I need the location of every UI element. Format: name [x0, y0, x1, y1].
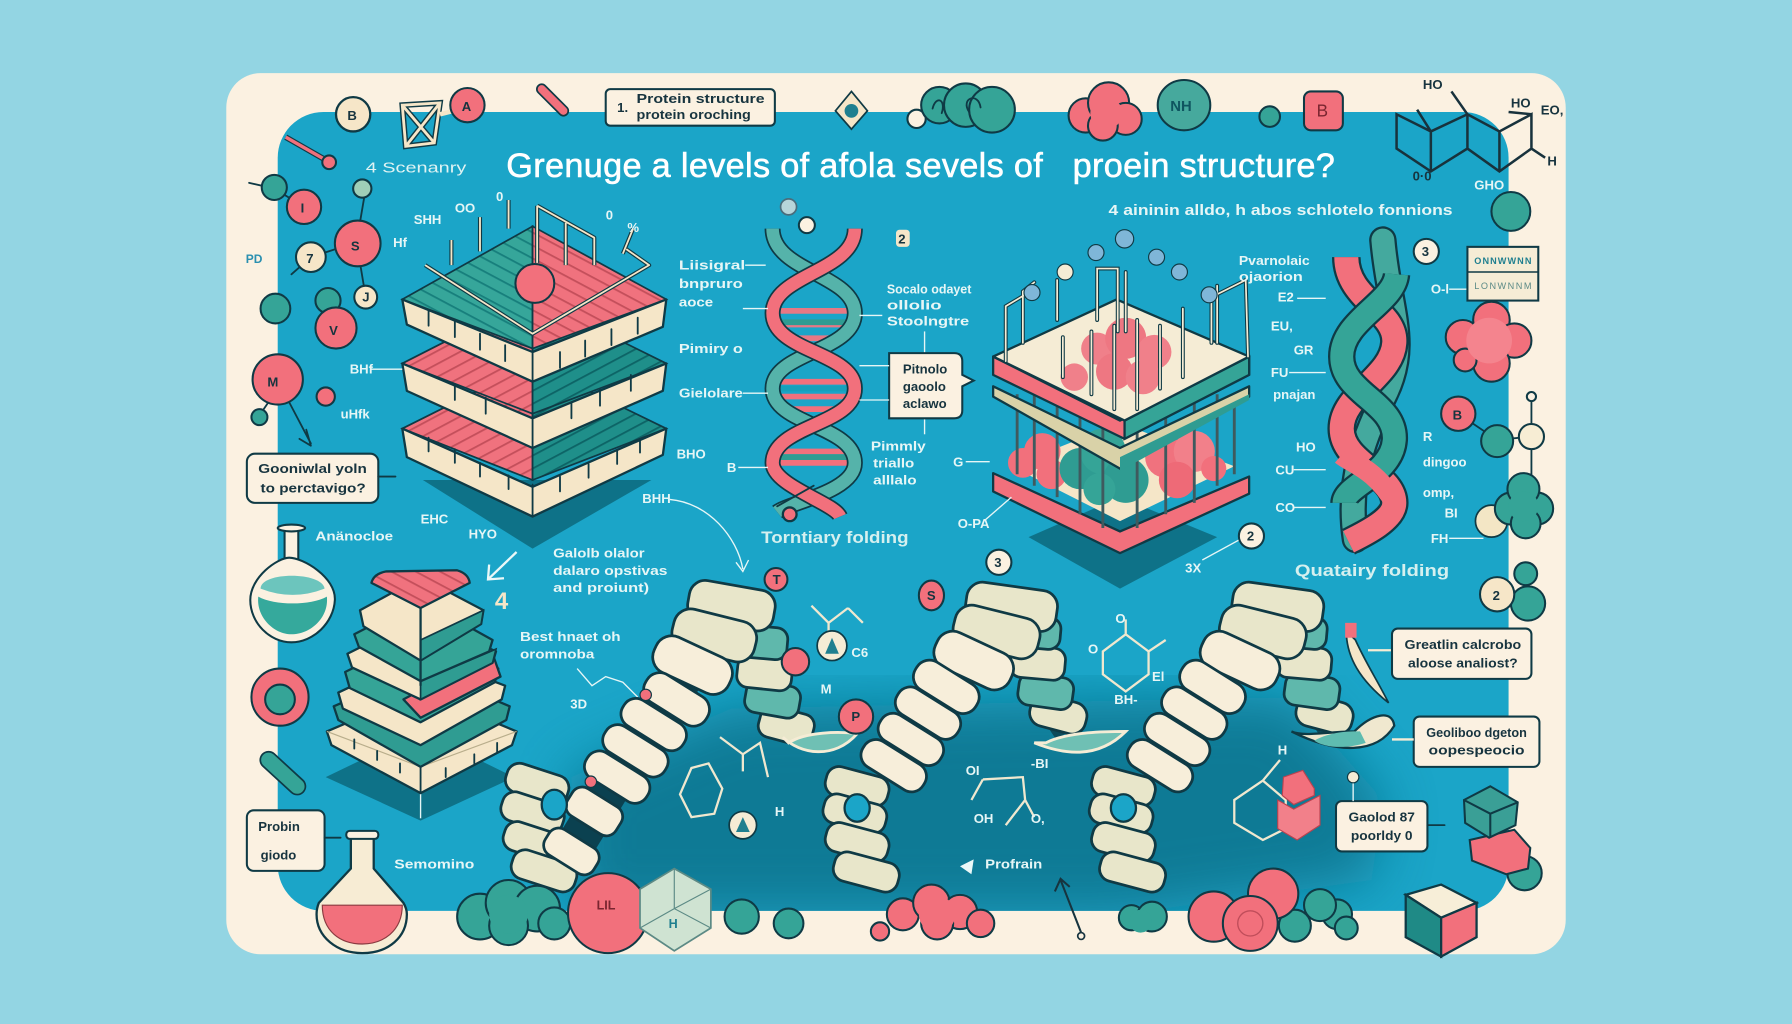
chemical marks: centre: [680, 606, 1286, 840]
labels: stack annotations: BHO: [677, 446, 706, 461]
labels: quaternary annotations: Pvarnolaic: [1239, 253, 1310, 268]
helix: quaternary: [1342, 240, 1397, 542]
title: Grenuge a levels of afola sevels of proein structure?: [506, 147, 1335, 185]
labels: quaternary annotations: CO: [1275, 500, 1295, 515]
callout: centre: Pitnolo: [903, 362, 947, 377]
text: centre note: dalaro opstivas: [553, 563, 667, 578]
callout: centre: [859, 353, 974, 418]
molecule cluster: left: M: [267, 374, 278, 389]
key: D pin: [1345, 623, 1392, 703]
labels: quaternary annotations: CU: [1275, 462, 1294, 477]
small chem labels: H: [775, 804, 784, 819]
icon: diamond: [835, 91, 867, 129]
labels: helix annotations: Liisigral: [679, 258, 745, 273]
pyramid stack: [326, 570, 517, 821]
molecule cluster: left: I: [301, 201, 304, 216]
labels: quaternary annotations: pnajan: [1273, 387, 1315, 402]
cubes: pink chem block: [1278, 770, 1320, 840]
callout: right two: Geoliboo dgeton: [1426, 725, 1527, 740]
molecule: right: B: [1453, 407, 1462, 422]
labels: stack annotations: %: [627, 220, 639, 235]
labels: helix annotations: Gielolare: [679, 386, 743, 401]
labels: quaternary annotations: BI: [1445, 506, 1458, 521]
label: protrain: Profrain: [985, 857, 1042, 872]
labels: stack annotations: [350, 189, 706, 541]
helix: DNA: [773, 199, 855, 521]
deep shade behind coils: [571, 697, 1383, 914]
small chem labels: O: [1088, 642, 1098, 657]
hex crystal: [640, 869, 711, 951]
stack: primary layers: [402, 200, 666, 549]
labels: quaternary annotations: [953, 253, 1483, 576]
cloud: pink right: [1446, 302, 1531, 382]
chemical structure: top right: GHO: [1474, 178, 1504, 193]
molecules: top-left icons: [286, 88, 563, 169]
callout: right three: poorldy 0: [1351, 828, 1413, 843]
labels: quaternary annotations: FU: [1271, 365, 1288, 380]
callout: right one: aloose analiost?: [1408, 655, 1518, 670]
molecule cluster: left: 7: [306, 251, 314, 266]
heading: tertiary folding: Torntiary folding: [761, 528, 909, 547]
small chem labels: OH: [974, 811, 993, 826]
badges: numbers: [986, 239, 1439, 575]
small chem labels: -BI: [1031, 756, 1048, 771]
platform: tertiary structure: [993, 230, 1249, 589]
text: centre note: [553, 546, 667, 595]
heading: quaternary folding: Quatairy folding: [1295, 561, 1449, 580]
arrow: up: [1055, 879, 1085, 939]
badges: coil markers: T: [773, 572, 781, 587]
labels: quaternary annotations: O-l: [1431, 282, 1449, 297]
cubes: stacked right: [1464, 786, 1542, 890]
cube: big bottom: [1406, 885, 1477, 957]
labels: quaternary annotations: GR: [1294, 342, 1314, 357]
flask: teal: [250, 525, 335, 642]
badges: numbers: 3: [1422, 244, 1429, 259]
callout: left question: [247, 454, 395, 503]
labels: quaternary annotations: FH: [1431, 531, 1448, 546]
labels: stack annotations: 0: [606, 207, 613, 222]
panel: cream card: [226, 73, 1566, 954]
label: protrain: [960, 857, 1042, 874]
chemical structure: top right: HO: [1423, 77, 1443, 92]
labels: quaternary annotations: EU,: [1271, 318, 1293, 333]
label: secondary: 4 Scenanry: [366, 161, 467, 177]
small chem labels: O,: [1031, 811, 1045, 826]
icon: pink ring: [251, 669, 309, 726]
molecule: right: [1441, 392, 1553, 538]
cloud: teal small: [1119, 902, 1167, 933]
label box: protein: Probin: [258, 819, 300, 834]
text: heat note: oromnoba: [520, 646, 595, 661]
coil: second helix: [820, 580, 1090, 895]
callout: right three: [1336, 771, 1445, 851]
callout: right three: Gaolod 87: [1349, 810, 1415, 825]
arrow: curved to coil: [670, 499, 749, 571]
label: level 4: 4: [495, 588, 509, 615]
labels: stack annotations: 0: [496, 189, 503, 204]
label: uHfk: uHfk: [341, 406, 370, 421]
small chem labels: [775, 611, 1287, 826]
table box: [1467, 247, 1538, 301]
molecules: top-left icons: A: [462, 99, 472, 114]
badges: coil markers: [729, 568, 944, 839]
hex crystal: H: [669, 917, 678, 931]
label box: protein: giodo: [261, 847, 296, 862]
small chem labels: El: [1152, 669, 1164, 684]
dots: bottom: [725, 899, 803, 938]
callout: left question: Gooniwlal yoln: [258, 461, 367, 476]
molecule: number 2: 2: [1493, 588, 1500, 603]
table box: ONNWWNN: [1474, 256, 1531, 266]
small chem labels: OI: [966, 763, 980, 778]
labels: helix annotations: Pimmly: [871, 438, 927, 453]
clouds: bottom left: LIL: [597, 899, 616, 913]
molecule cluster: left: [249, 175, 381, 446]
cloud: bottom centre pink: [871, 885, 994, 941]
label: PD: PD: [246, 252, 263, 266]
badges: coil markers: S: [927, 588, 936, 603]
top note box: 1.: [617, 100, 628, 115]
molecule cluster: left: S: [351, 238, 360, 253]
callout: right one: [1392, 629, 1531, 679]
icon: teal capsule: [269, 760, 297, 786]
label: semomino: Semomino: [394, 857, 474, 872]
labels: stack annotations: HYO: [469, 526, 497, 541]
clouds: top row: NH: [1170, 99, 1192, 115]
badges: numbers: 3: [994, 555, 1002, 570]
coil: first helix: [498, 578, 857, 895]
callout: right one: Greatlin calcrobo: [1405, 637, 1521, 652]
callout: right two: oopespeocio: [1429, 742, 1525, 757]
labels: quaternary annotations: 3X: [1185, 561, 1201, 576]
labels: helix annotations: aoce: [679, 294, 713, 309]
labels: stack annotations: OO: [455, 201, 475, 216]
text: centre note: Galolb olalor: [553, 546, 645, 561]
labels: helix annotations: B: [727, 460, 736, 475]
labels: helix annotations: Pimiry o: [679, 341, 743, 356]
coil: third helix: [1086, 580, 1356, 895]
labels: quaternary annotations: HO: [1296, 439, 1316, 454]
text: heat note: Best hnaet oh: [520, 629, 621, 644]
table box: LONWNNM: [1474, 281, 1531, 291]
ribbon: tail loop: [1291, 715, 1394, 748]
clouds: bottom left: [457, 873, 648, 953]
labels: helix annotations: 2: [898, 231, 906, 246]
flask: pink: [317, 831, 407, 953]
text: heat note: [520, 629, 638, 712]
labels: quaternary annotations: dingoo: [1423, 454, 1467, 469]
labels: helix annotations: [679, 230, 972, 488]
labels: helix annotations: bnpruro: [679, 276, 743, 291]
molecule cluster: left: V: [329, 323, 338, 338]
labels: stack annotations: Hf: [393, 235, 408, 250]
subtitle: 4 aininin alldo, h abos schlotelo fonnions: [1109, 203, 1453, 219]
labels: quaternary annotations: ojaorion: [1239, 269, 1303, 284]
labels: stack annotations: SHH: [414, 212, 441, 227]
labels: stack annotations: EHC: [421, 511, 449, 526]
molecule cluster: left: J: [362, 290, 370, 305]
callout: right two: [1392, 717, 1539, 767]
badges: numbers: 2: [1247, 529, 1254, 544]
panel: blue field: [278, 112, 1509, 911]
chemical structure: top right: [1397, 77, 1563, 231]
molecule: number 2: [1480, 562, 1545, 621]
top note box: [606, 89, 775, 126]
badges: coil markers: P: [851, 709, 860, 724]
text: heat note: 3D: [570, 697, 587, 712]
cloud: bottom pink and teal: [1189, 869, 1358, 951]
chemical structure: top right: H: [1547, 154, 1557, 169]
small chem labels: M: [821, 682, 832, 697]
labels: stack annotations: BHf: [350, 362, 374, 377]
labels: quaternary annotations: E2: [1278, 290, 1294, 305]
labels: quaternary annotations: O-PA: [958, 516, 990, 531]
small chem labels: O: [1115, 611, 1126, 626]
labels: helix annotations: ollolio: [887, 298, 942, 313]
label: amino: Anänocloe: [315, 529, 393, 544]
text: centre note: and proiunt): [553, 580, 649, 595]
labels: quaternary annotations: omp,: [1423, 485, 1454, 500]
small chem labels: BH-: [1114, 692, 1138, 707]
top note box: protein oroching: [637, 107, 751, 122]
callout: centre: aclawo: [903, 396, 947, 411]
ribbon: second connector: [1034, 731, 1126, 752]
chemical structure: top right: 0·0: [1413, 169, 1432, 184]
labels: quaternary annotations: G: [953, 454, 963, 469]
chemical structure: top right: EO,: [1541, 102, 1563, 117]
top note box: Protein structure: [637, 91, 765, 106]
labels: quaternary annotations: R: [1423, 429, 1433, 444]
callout: centre: gaoolo: [903, 379, 946, 394]
chemical structure: top right: HO: [1511, 95, 1531, 110]
clouds: top row: [907, 80, 1343, 141]
clouds: top row: B: [1317, 101, 1328, 121]
labels: helix annotations: triallo: [873, 455, 914, 470]
labels: stack annotations: BHH: [642, 491, 671, 506]
small chem labels: H: [1278, 742, 1287, 757]
small chem labels: C6: [851, 645, 868, 660]
label box: protein: [247, 810, 341, 871]
labels: helix annotations: alllalo: [873, 473, 917, 488]
molecules: top-left icons: B: [347, 108, 357, 123]
labels: helix annotations: Stoolngtre: [887, 314, 969, 329]
labels: helix annotations: Socalo odayet: [887, 282, 972, 297]
callout: left question: to perctavigo?: [261, 481, 366, 496]
arrow: to pyramid: [488, 552, 517, 579]
